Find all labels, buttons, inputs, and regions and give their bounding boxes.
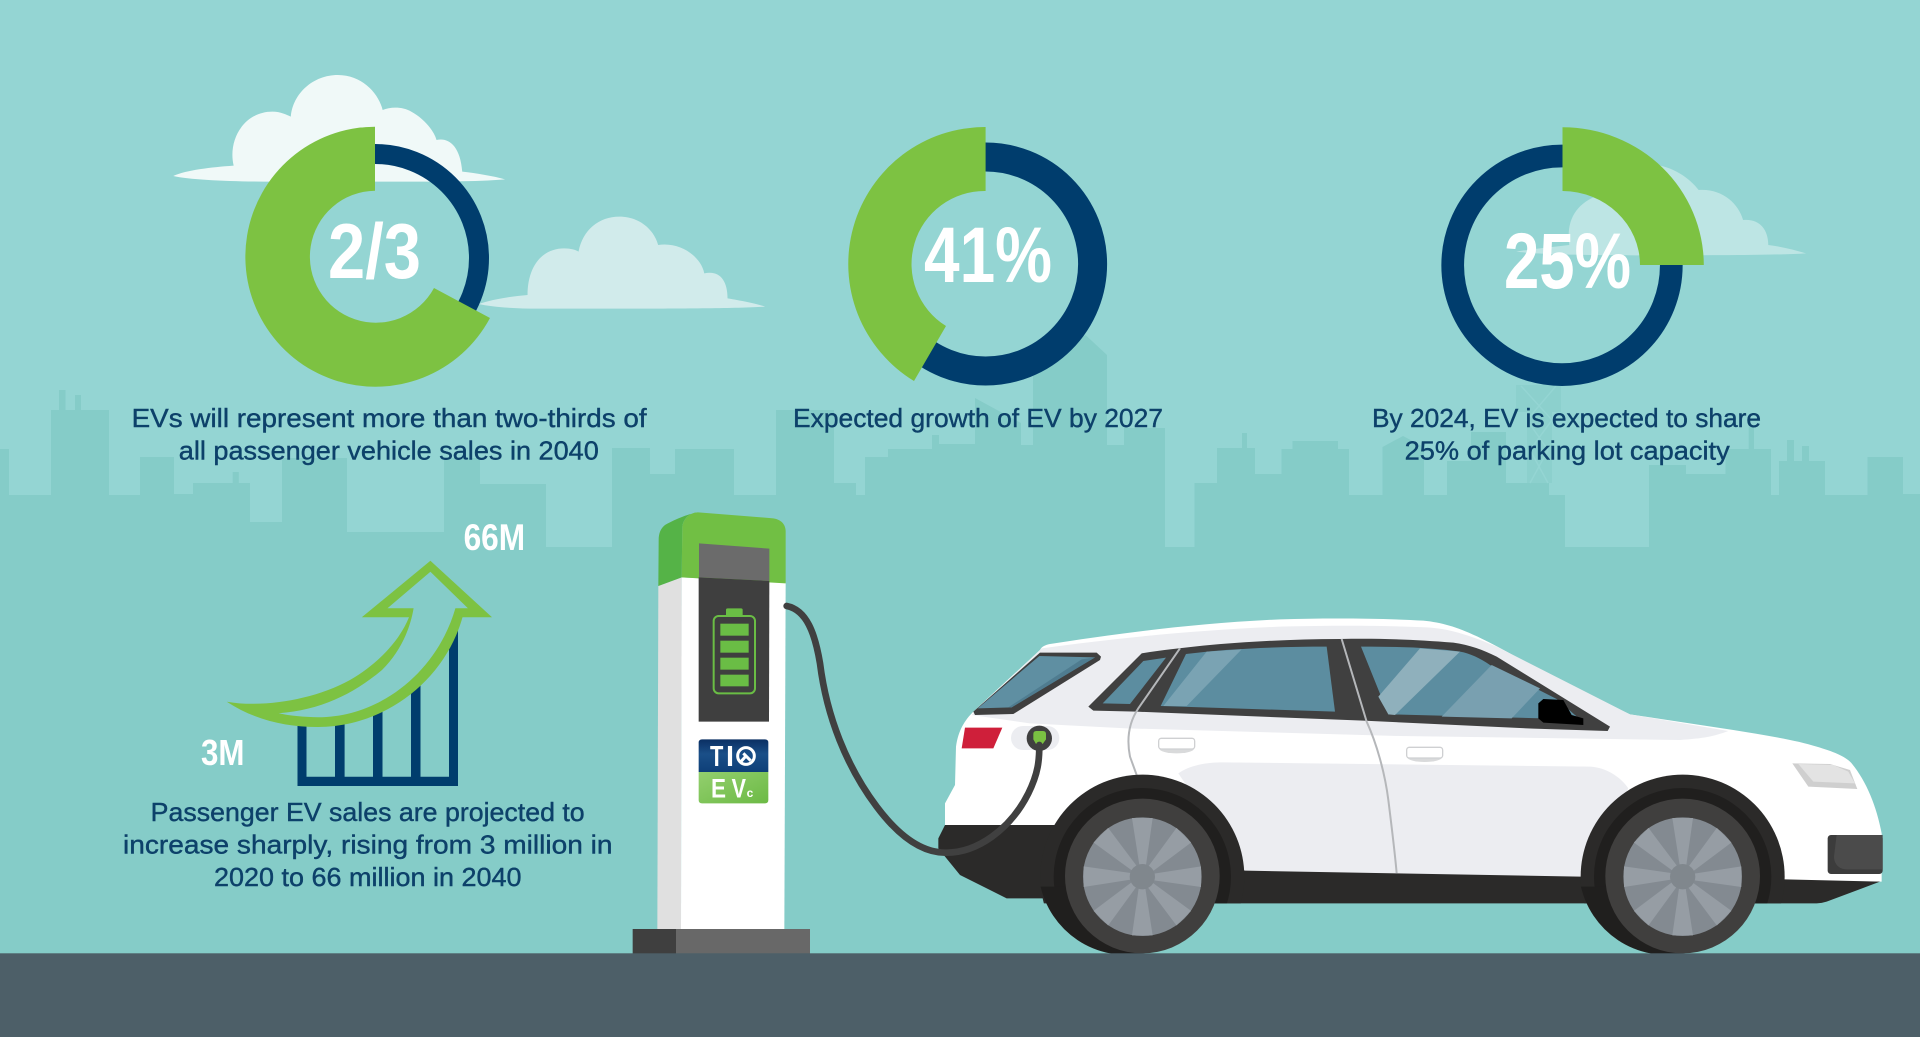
logo badge: E xyxy=(711,773,726,803)
label: 66M: 66M xyxy=(464,517,525,558)
station green cap xyxy=(658,512,786,586)
value: 41%: 41% xyxy=(924,210,1052,299)
charging station xyxy=(633,512,810,954)
headlight xyxy=(1792,763,1857,789)
caption: parking: By 2024, EV is expected to share xyxy=(1372,403,1761,433)
lower skirt xyxy=(938,825,1880,903)
front grille xyxy=(1828,835,1883,874)
window frame xyxy=(1088,639,1610,731)
logo badge xyxy=(699,739,768,803)
electric car xyxy=(938,619,1883,979)
logo badge: V xyxy=(732,773,746,803)
cloud: large white xyxy=(173,75,505,182)
logo badge: T xyxy=(710,741,723,773)
growth chart: bars and arrow xyxy=(227,561,492,786)
front wheel xyxy=(1580,774,1785,954)
donut chart: 41 percent xyxy=(848,127,1093,381)
station base xyxy=(633,929,810,954)
station body xyxy=(657,577,786,929)
road xyxy=(0,953,1920,1037)
donut chart: 25 percent xyxy=(1453,127,1704,375)
rear wheel xyxy=(1041,774,1244,954)
logo badge: c xyxy=(747,786,754,800)
caption: two-thirds: EVs will represent more than two-thirds of xyxy=(132,403,647,433)
charge port xyxy=(1011,726,1059,751)
station screen xyxy=(699,543,769,722)
car body xyxy=(945,619,1882,882)
city skyline xyxy=(0,335,1920,960)
caption: growth: Expected growth of EV by 2027 xyxy=(793,403,1163,433)
arrow xyxy=(227,561,492,727)
donut chart: two-thirds xyxy=(245,127,490,387)
caption: sales projection: 2020 to 66 million in 2040 xyxy=(214,862,522,892)
caption: parking: 25% of parking lot capacity xyxy=(1405,436,1730,466)
bars xyxy=(298,630,458,786)
cloud: right xyxy=(1516,163,1806,255)
door seams xyxy=(1128,639,1397,873)
caption: two-thirds: all passenger vehicle sales in 2040 xyxy=(179,436,599,466)
value: 25%: 25% xyxy=(1504,216,1631,305)
side windows xyxy=(1103,647,1580,719)
side mirror xyxy=(1538,699,1583,725)
logo badge: I xyxy=(726,741,734,773)
rear window xyxy=(973,653,1101,715)
icon: battery xyxy=(714,608,755,693)
caption: sales projection xyxy=(123,797,612,892)
caption: sales projection: Passenger EV sales are projected to xyxy=(151,797,585,827)
cloud: middle xyxy=(479,217,765,309)
body shading xyxy=(972,626,1728,878)
caption: parking xyxy=(1372,403,1761,466)
charging cable xyxy=(787,606,1039,853)
label: 3M: 3M xyxy=(201,732,244,773)
caption: sales projection: increase sharply, rising from 3 million in xyxy=(123,830,612,860)
value: 2/3: 2/3 xyxy=(328,207,421,295)
door handles xyxy=(1159,738,1443,762)
caption: two-thirds xyxy=(132,403,647,466)
tail light xyxy=(962,728,1002,748)
